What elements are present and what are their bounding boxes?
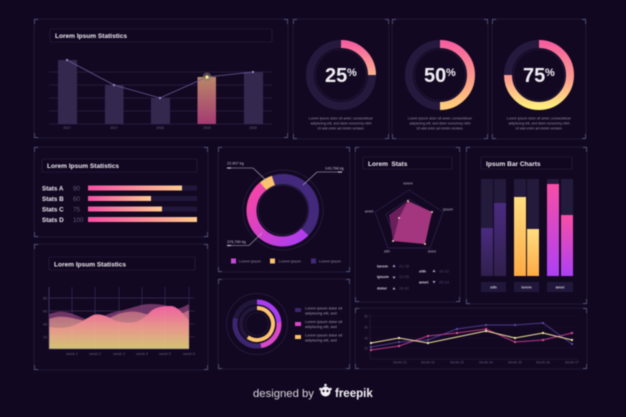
line chart: Month 05	[508, 360, 522, 364]
area chart: week 1	[66, 352, 78, 356]
panel: concentric ring chart	[218, 279, 350, 369]
heading: lorem stats	[363, 157, 452, 169]
area chart: 80	[43, 296, 47, 300]
ring legend: Lorem ipsum dolor sit	[305, 319, 343, 324]
heading: statistics	[50, 29, 272, 42]
line chart: Month 03	[450, 360, 464, 364]
stat bars: Stats C	[42, 206, 64, 214]
line chart: Month 06	[536, 360, 550, 364]
line chart: Month 02	[421, 360, 435, 364]
ring legend	[295, 306, 343, 342]
panel: lorem ipsum statistics bar and line chart	[34, 19, 288, 138]
area chart: 40	[43, 322, 47, 326]
heading: horizontal stats	[42, 159, 197, 172]
radar readouts: 12.05	[399, 274, 410, 279]
radar readouts: sith	[419, 268, 427, 274]
line chart: Month 01	[393, 360, 407, 364]
radar readouts: 10.12	[439, 268, 450, 274]
radar chart: lorem	[403, 182, 413, 186]
stat bars: 90	[73, 186, 81, 192]
panel: 75 percent gauge: Lorem ipsum dolor sit amet, consectetuer	[507, 116, 572, 120]
line chart: 40	[364, 336, 368, 340]
panel: 25 percent gauge: Lorem ipsum dolor sit amet, consectetuer	[309, 116, 374, 120]
heading: area chart: Lorem Ipsum Statistics	[54, 262, 126, 268]
callouts	[227, 162, 344, 246]
ring legend: adipiscing elit, sed	[305, 310, 337, 316]
panel: 50 percent gauge: %	[446, 67, 456, 79]
grouped bars: sith	[490, 286, 498, 290]
radar readouts: dolor	[377, 286, 387, 290]
line chart: Month 07	[565, 360, 579, 364]
heading: horizontal stats: Lorem Ipsum Statistics	[47, 163, 119, 170]
panel: 75 percent gauge: 75	[523, 65, 545, 87]
concentric rings	[226, 294, 288, 354]
radar readouts: amet	[419, 280, 429, 284]
stat bars	[42, 186, 197, 224]
stat bars: 60	[73, 196, 81, 203]
footer: designed by freepik: freepik	[335, 388, 373, 400]
grouped bars: amet	[556, 286, 565, 290]
legend: Lorem ipsum	[239, 260, 261, 264]
panel: 50 percent gauge: 50	[424, 65, 446, 87]
line chart	[364, 314, 579, 364]
area chart	[43, 287, 195, 356]
legend: Lorem ipsum	[279, 260, 301, 264]
ring legend: adipiscing elit, sed	[305, 324, 337, 329]
panel: 75 percent gauge: %	[545, 67, 555, 79]
stat bars: Stats A	[42, 186, 64, 192]
bar chart	[49, 59, 272, 130]
bar chart: 2019	[203, 126, 211, 130]
line chart: 80	[364, 314, 368, 318]
grouped bars: lorem	[521, 286, 532, 290]
callouts: 376,789 kg	[227, 240, 246, 244]
panel: 25 percent gauge	[293, 19, 389, 139]
panel: radar stats	[355, 147, 460, 302]
footer: designed by freepik: designed by	[253, 388, 314, 400]
grouped bars	[481, 179, 573, 292]
panel: horizontal stats bars	[34, 147, 208, 237]
ring legend: Lorem ipsum dolor sit	[305, 332, 343, 338]
bar chart: 2020	[249, 126, 257, 130]
stat bars: 100	[73, 217, 84, 224]
donut	[243, 170, 323, 250]
stat bars: 75	[73, 206, 81, 214]
heading: ipsum bar charts	[481, 157, 572, 169]
radar readouts: 16.32	[399, 286, 410, 290]
panel: 75 percent gauge: Ut wisi enim ad minim veniam.	[515, 126, 563, 130]
panel: 75 percent gauge: adipiscing elit, sed diam nonummy nibh	[508, 122, 570, 126]
panel: 25 percent gauge: %	[347, 67, 357, 79]
stat bars: Stats B	[42, 196, 64, 203]
heading: ipsum bar charts: Ipsum Bar Charts	[486, 161, 541, 168]
line chart: 20	[364, 346, 368, 350]
panel: 50 percent gauge: Ut wisi enim ad minim veniam.	[416, 126, 464, 130]
callouts: 22,907 kg	[227, 162, 244, 166]
ring legend: Lorem ipsum dolor sit	[305, 306, 343, 310]
ring legend: adipiscing elit, sed	[305, 338, 337, 342]
area chart: week 4	[136, 352, 148, 356]
radar readouts: ipsum	[377, 274, 389, 279]
line chart: Month 04	[479, 360, 493, 364]
legend: Lorem ipsum	[319, 260, 341, 264]
icon: freepik mascot	[319, 384, 332, 396]
line chart: 60	[364, 326, 368, 330]
area chart: week 2	[89, 352, 101, 356]
radar readouts: 20.14	[439, 280, 450, 284]
radar chart: ipsum	[443, 208, 453, 212]
stat bars: Stats D	[42, 217, 64, 224]
area chart: 20	[43, 336, 47, 340]
bar chart: 2018	[156, 126, 164, 130]
radar chart: amet	[365, 210, 374, 214]
heading: statistics: Lorem Ipsum Statistics	[55, 33, 127, 40]
panel: area chart	[34, 244, 208, 370]
heading: area chart	[49, 257, 195, 270]
radar readouts: 21.78	[399, 264, 410, 268]
panel: donut chart	[218, 147, 350, 272]
radar readouts: lorem	[377, 264, 388, 268]
panel: 50 percent gauge: adipiscing elit, sed diam nonummy nibh	[409, 122, 471, 126]
radar chart: sith	[384, 250, 390, 254]
callouts: 143,768 kg	[325, 166, 344, 170]
panel: 25 percent gauge: adipiscing elit, sed diam nonummy nibh	[310, 122, 372, 126]
legend	[231, 258, 341, 264]
radar readouts	[377, 264, 450, 290]
panel: 75 percent gauge	[492, 19, 586, 139]
heading: lorem stats: Lorem Stats	[368, 161, 408, 168]
area chart: week 5	[159, 352, 171, 356]
panel: ipsum bar charts	[466, 147, 587, 304]
radar chart: dolor	[428, 250, 437, 254]
panel: 25 percent gauge: Ut wisi enim ad minim veniam.	[317, 126, 365, 130]
panel: 50 percent gauge	[392, 19, 488, 139]
area chart: 60	[43, 310, 47, 314]
bar chart: 2017	[110, 126, 118, 130]
bar chart: 2017	[63, 126, 71, 130]
panel: 25 percent gauge: 25	[325, 65, 347, 87]
area chart: week 6	[183, 352, 195, 356]
panel: 50 percent gauge: Lorem ipsum dolor sit amet, consectetuer	[408, 116, 473, 120]
area chart: week 3	[113, 352, 125, 356]
footer: designed by freepik	[253, 384, 373, 400]
radar chart	[365, 182, 453, 254]
panel: multi-line chart	[355, 308, 587, 369]
